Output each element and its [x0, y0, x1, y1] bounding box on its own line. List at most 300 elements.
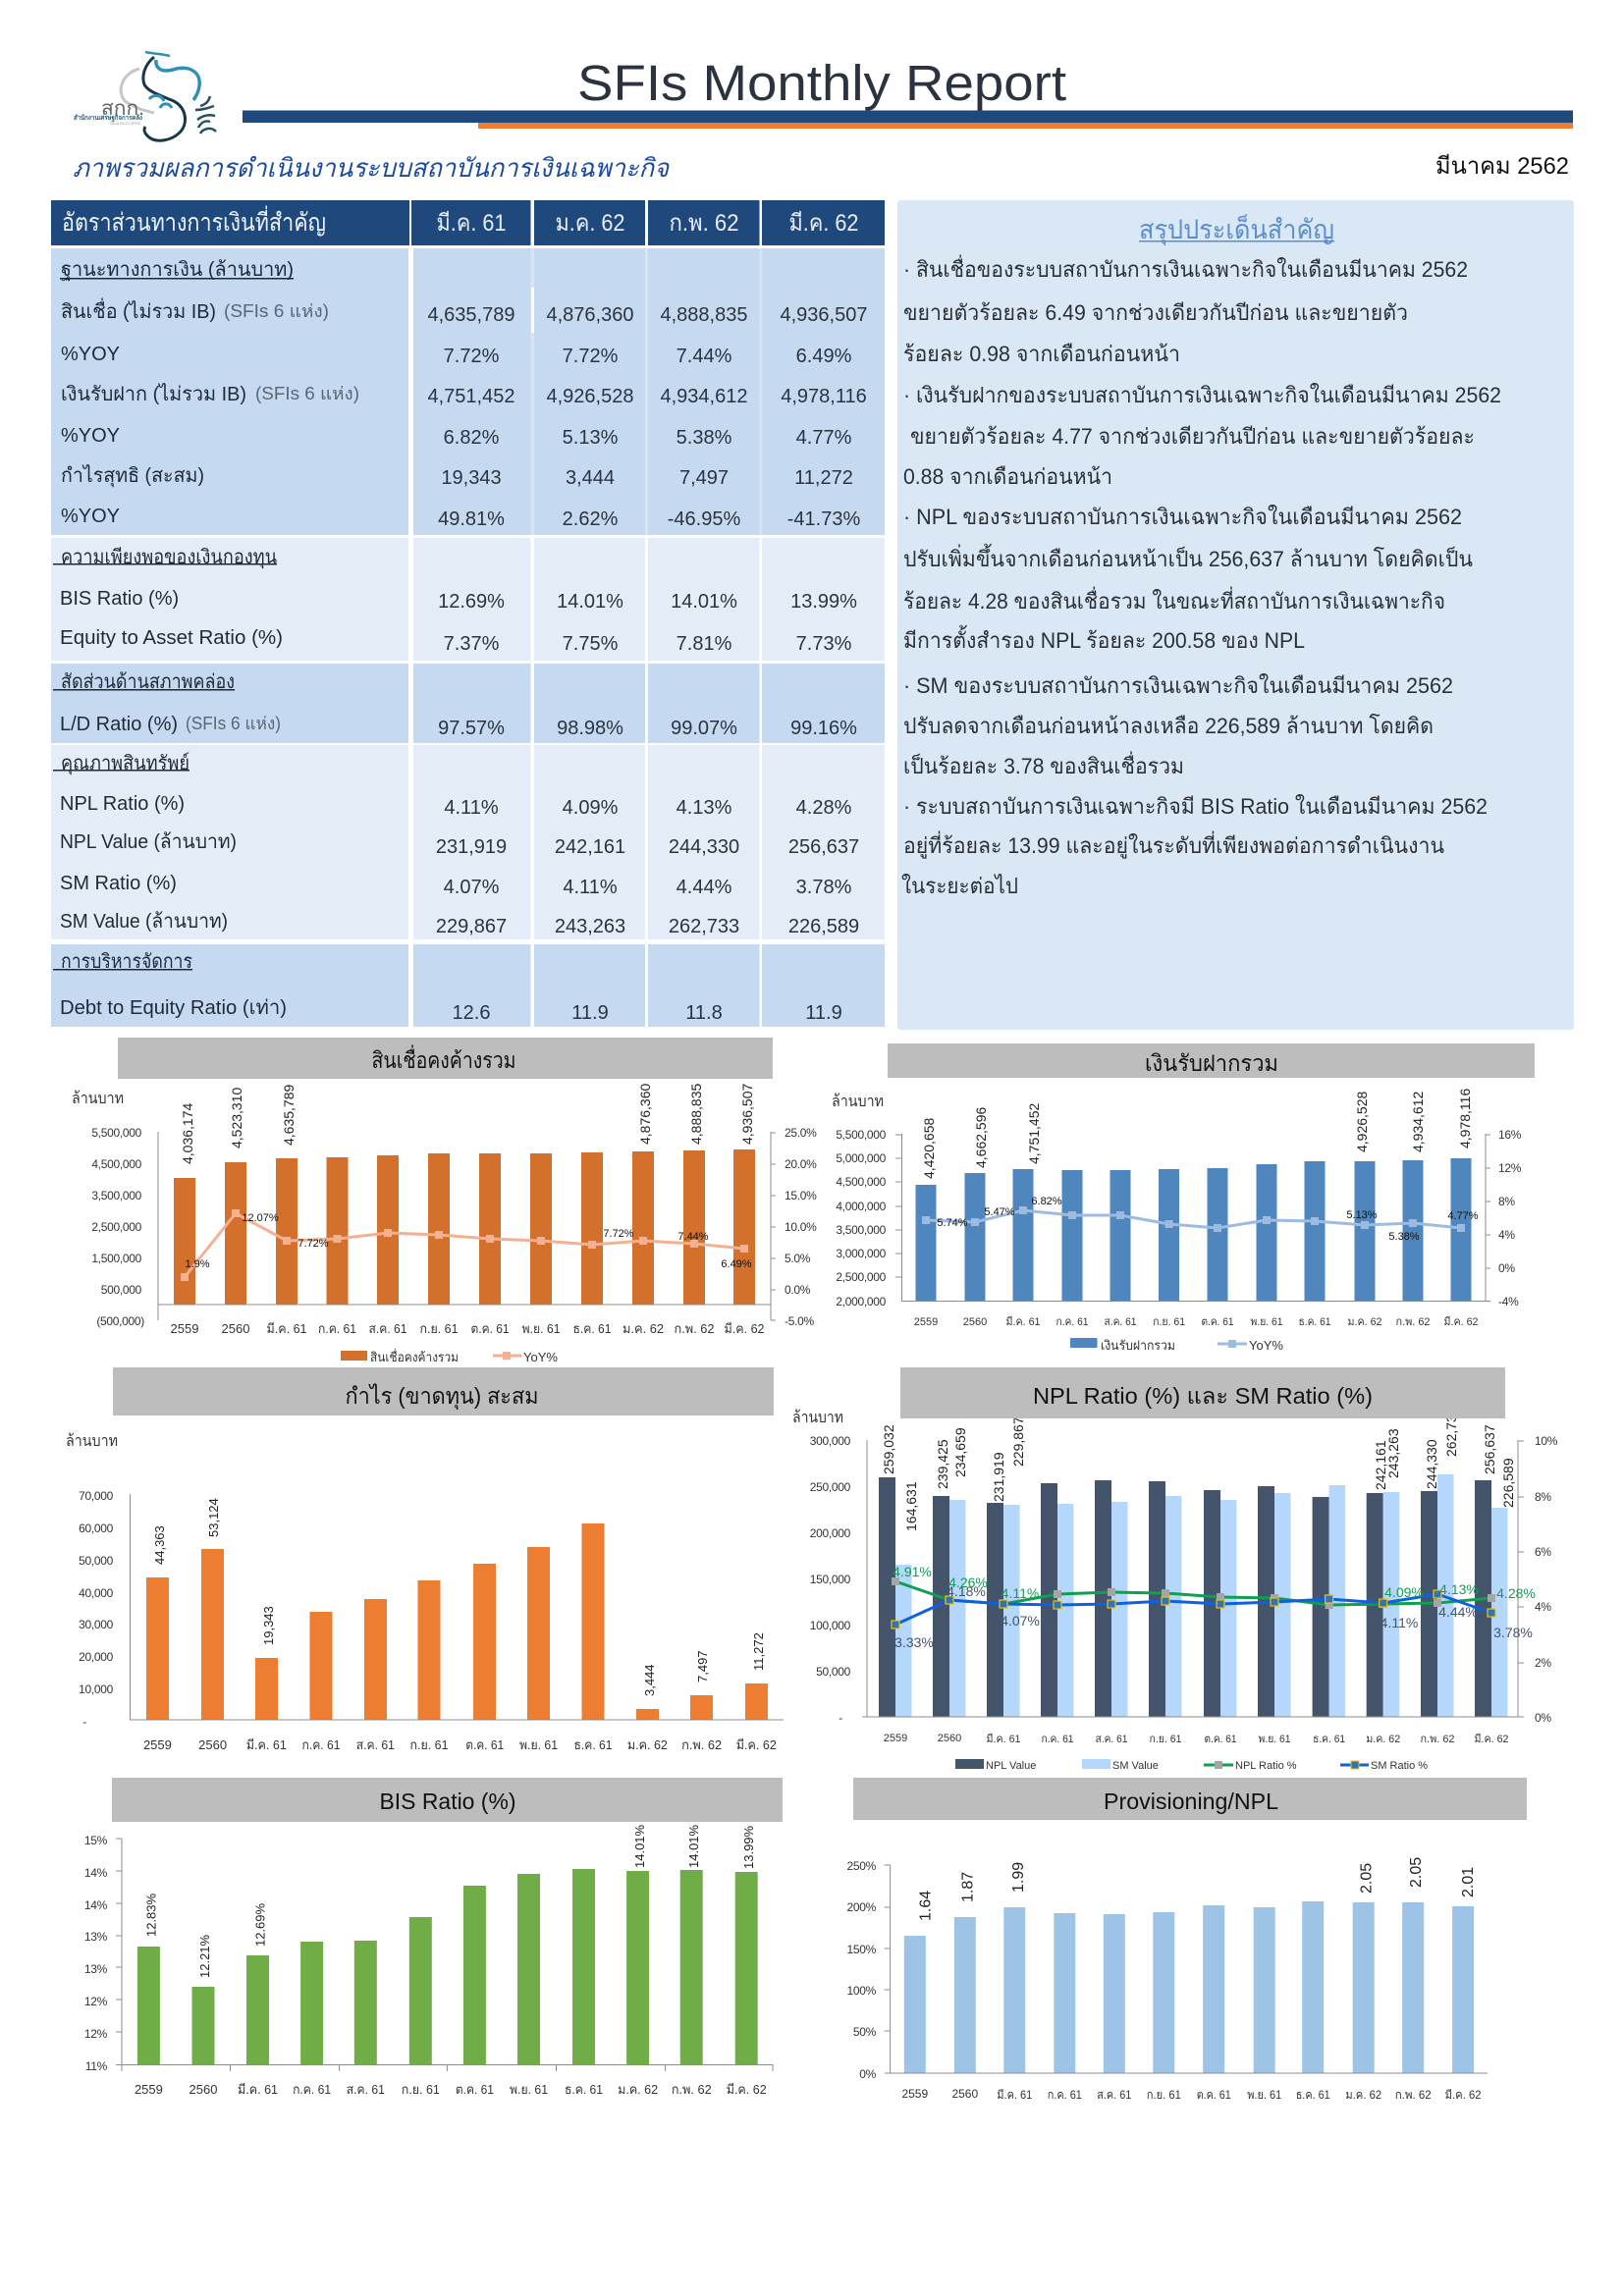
- bar value labels: 4,876,360: [637, 1084, 653, 1145]
- legend: สินเชื่อคงค้างรวม: [370, 1349, 459, 1364]
- x axis labels: พ.ย. 61: [519, 1737, 558, 1752]
- right axis: 10.0%: [785, 1220, 817, 1234]
- chart title bar: สินเชื่อคงค้างรวม: [371, 1044, 516, 1073]
- SM ratio data labels: 3.78%: [1493, 1625, 1533, 1640]
- legend: SM Value: [1112, 1760, 1159, 1772]
- section: financial position: 4,876,360: [547, 304, 633, 326]
- NPL ratio line: [892, 1577, 1495, 1609]
- right axis: [1535, 1434, 1558, 1725]
- chart title bar: [853, 1778, 1527, 1820]
- right axis: -4%: [1498, 1295, 1519, 1308]
- panel: financial ratios table: [51, 200, 885, 1027]
- bar value labels: 14.01%: [632, 1824, 647, 1868]
- section: asset quality: NPL Ratio (%): [60, 793, 185, 815]
- x axis labels: ส.ค. 61: [1097, 2088, 1132, 2102]
- section: financial position: 4.77%: [796, 427, 852, 449]
- summary bullet: SM: [903, 673, 1453, 778]
- x axis labels: ก.พ. 62: [1420, 1734, 1455, 1745]
- left axis: 4,500,000: [836, 1175, 887, 1189]
- left axis: 150,000: [810, 1573, 851, 1586]
- summary bullet: NPL: ปรับเพิ่มขึ้นจากเดือนก่อนหน้าเป็น 256,637 ล้านบาท โดยคิดเป็น: [903, 544, 1473, 571]
- section: asset quality: 4.13%: [677, 797, 732, 819]
- legend: YoY%: [523, 1350, 558, 1364]
- y axis: 10,000: [79, 1682, 114, 1696]
- section: management: Debt to Equity Ratio (เท่า): [60, 997, 287, 1019]
- YoY data labels: 7.72%: [603, 1228, 634, 1240]
- section: financial position: 7.72%: [563, 346, 619, 367]
- legend: [341, 1349, 558, 1364]
- legend: SM Ratio %: [1371, 1760, 1428, 1772]
- NPL ratio data labels: 4.11%: [1001, 1585, 1039, 1601]
- bar value labels: 243,263: [1385, 1428, 1401, 1478]
- section: financial position: (SFIs 6 แห่ง): [255, 384, 359, 403]
- bar value labels: 242,161: [1373, 1440, 1388, 1490]
- section: asset quality: 242,161: [555, 836, 625, 858]
- YoY data labels: [937, 1196, 1479, 1243]
- section: financial position: 4,936,507: [781, 304, 867, 326]
- section: capital adequacy: 14.01%: [557, 591, 623, 613]
- SM ratio data labels: [894, 1583, 1533, 1650]
- section: financial position: 7.72%: [444, 346, 500, 367]
- x axis labels: 2560: [951, 2087, 978, 2101]
- x axis labels: มี.ค. 61: [246, 1737, 287, 1752]
- x axis labels: พ.ย. 61: [522, 1321, 560, 1336]
- section: asset quality: 4.11%: [563, 877, 618, 898]
- x axis labels: ธ.ค. 61: [565, 2082, 603, 2097]
- x axis labels: [884, 1733, 1508, 1745]
- x axis labels: ม.ค. 62: [618, 2082, 658, 2097]
- YoY data labels: 12.07%: [242, 1212, 279, 1224]
- bar value labels: 234,659: [952, 1427, 968, 1477]
- summary bullet: NPL: [903, 505, 1473, 653]
- YoY data labels: 7.44%: [677, 1231, 709, 1243]
- right axis: 2%: [1535, 1656, 1551, 1670]
- left axis: 2,500,000: [91, 1220, 142, 1234]
- x axis labels: ธ.ค. 61: [1298, 1316, 1331, 1328]
- y axis: 30,000: [79, 1618, 114, 1631]
- chart title bar: [118, 1038, 773, 1079]
- section: liquidity: สัดส่วนด้านสภาพคล่อง: [61, 671, 235, 693]
- NPL ratio data labels: 4.09%: [1384, 1584, 1424, 1600]
- bar value labels: [921, 1089, 1473, 1179]
- left axis: 2,500,000: [836, 1270, 887, 1284]
- x axis labels: ก.ย. 61: [1149, 1734, 1182, 1745]
- x axis labels: มี.ค. 62: [725, 1321, 764, 1336]
- section: asset quality: NPL Value (ล้านบาท): [60, 831, 237, 853]
- x axis labels: ก.ย. 61: [410, 1737, 448, 1752]
- bar value labels: 231,919: [991, 1452, 1006, 1502]
- x axis labels: ส.ค. 61: [1096, 1734, 1127, 1745]
- x axis labels: 2559: [135, 2082, 163, 2097]
- y axis: [84, 1834, 773, 2073]
- section: asset quality: 226,589: [788, 916, 859, 937]
- section: capital adequacy: 7.37%: [444, 633, 500, 655]
- subtitle: ภาพรวมผลการดำเนินงานระบบสถาบันการเงินเฉพาะกิจ: [73, 153, 671, 183]
- section: management: 11.9: [571, 1002, 609, 1024]
- chart title bar: เงินรับฝากรวม: [1145, 1050, 1278, 1076]
- chart: BIS ratio: [84, 1778, 783, 2097]
- bars: [137, 1869, 758, 2064]
- y axis: 50%: [853, 2025, 877, 2039]
- unit label: ล้านบาท: [72, 1090, 124, 1107]
- x axis labels: ก.ย. 61: [420, 1321, 458, 1336]
- left axis: 3,000,000: [836, 1247, 887, 1260]
- YoY data labels: 5.47%: [984, 1206, 1015, 1218]
- left axis: [810, 1434, 1524, 1725]
- y axis: 150%: [846, 1943, 877, 1956]
- YoY data labels: 6.49%: [721, 1258, 752, 1270]
- bar value labels: [917, 1857, 1477, 1921]
- chart: NPL and SM ratio: [792, 1367, 1558, 1772]
- section: asset quality: 3.78%: [796, 877, 852, 898]
- section: capital adequacy: 7.81%: [677, 633, 732, 655]
- x axis labels: ต.ค. 61: [1197, 2088, 1231, 2102]
- right axis: 15.0%: [785, 1189, 817, 1202]
- title: SFIs Monthly Report: [577, 55, 1066, 111]
- section: financial position: 4,751,452: [428, 386, 514, 407]
- section: liquidity: 97.57%: [438, 718, 505, 739]
- x axis labels: 2560: [222, 1321, 249, 1336]
- x axis labels: 2559: [143, 1737, 172, 1752]
- x axis labels: [171, 1321, 764, 1336]
- y axis: 100%: [846, 1984, 877, 1998]
- bar value labels: 259,032: [881, 1424, 896, 1474]
- bars: [174, 1149, 755, 1305]
- section: financial position: กำไรสุทธิ (สะสม): [61, 464, 204, 488]
- header bar orange: [478, 123, 1573, 129]
- bar value labels: 13.99%: [741, 1825, 756, 1869]
- section: asset quality: 4.44%: [677, 877, 732, 898]
- left axis: 300,000: [810, 1434, 851, 1448]
- x axis labels: 2559: [171, 1321, 198, 1336]
- bar value labels: 4,523,310: [229, 1088, 244, 1148]
- y axis: 13%: [84, 1930, 108, 1944]
- x axis labels: ต.ค. 61: [1202, 1316, 1233, 1328]
- left axis: 1,500,000: [91, 1252, 142, 1265]
- section: financial position: สินเชื่อ (ไม่รวม IB): [61, 297, 216, 323]
- x axis labels: มี.ค. 62: [1445, 2088, 1482, 2102]
- section: capital adequacy: 14.01%: [671, 591, 737, 613]
- summary bullet: deposits: ขยายตัวร้อยละ 4.77 จากช่วงเดียวกันปีก่อน และขยายตัวร้อยละ: [910, 424, 1475, 449]
- section: financial position: 2.62%: [563, 508, 619, 530]
- x axis labels: ม.ค. 62: [627, 1737, 668, 1752]
- section: liquidity: 99.07%: [671, 718, 737, 739]
- chart title bar: NPL Ratio (%) และ SM Ratio (%): [1033, 1383, 1373, 1409]
- x axis labels: 2559: [884, 1733, 907, 1744]
- NPL ratio data labels: 4.91%: [893, 1564, 932, 1579]
- NPL ratio data labels: [893, 1564, 1536, 1601]
- x axis labels: พ.ย. 61: [510, 2082, 548, 2097]
- right axis: 4%: [1498, 1228, 1515, 1242]
- bar value labels: 2.05: [1359, 1863, 1375, 1894]
- bar value labels: 12.21%: [197, 1934, 212, 1978]
- section: liquidity: 99.16%: [790, 718, 857, 739]
- right axis: -5.0%: [785, 1314, 814, 1328]
- x axis labels: ม.ค. 62: [623, 1321, 664, 1336]
- section: asset quality: 231,919: [436, 836, 507, 858]
- SM ratio data labels: 4.44%: [1438, 1604, 1478, 1620]
- left axis: 50,000: [816, 1665, 851, 1679]
- x axis labels: ก.พ. 62: [1395, 2088, 1432, 2102]
- section: capital adequacy: ความเพียงพอของเงินกองทุน: [61, 547, 277, 569]
- x axis labels: ต.ค. 61: [456, 2082, 494, 2097]
- section: financial position: 4,934,612: [661, 386, 747, 407]
- bars: [146, 1523, 768, 1720]
- NPL ratio data labels: 4.26%: [948, 1575, 988, 1590]
- chart: total deposits: [832, 1043, 1535, 1353]
- bar value labels: 256,637: [1482, 1424, 1497, 1474]
- section: asset quality: 262,733: [669, 916, 739, 937]
- legend: NPL Value: [986, 1760, 1036, 1772]
- x axis labels: พ.ย. 61: [1247, 2088, 1281, 2102]
- section: management: การบริหารจัดการ: [61, 951, 192, 973]
- x axis labels: พ.ย. 61: [1251, 1316, 1282, 1328]
- bar value labels: 4,036,174: [180, 1103, 195, 1164]
- summary bullet: deposits: · เงินรับฝากของระบบสถาบันการเงินเฉพาะกิจในเดือนมีนาคม 2562: [903, 383, 1501, 407]
- left axis: [836, 1128, 1490, 1308]
- table header row: [51, 200, 885, 245]
- bar value labels: 1.99: [1010, 1862, 1027, 1893]
- left axis: 5,500,000: [91, 1126, 142, 1140]
- x axis labels: 2560: [938, 1733, 961, 1744]
- y axis: 50,000: [79, 1554, 114, 1568]
- section: financial position: เงินรับฝาก (ไม่รวม IB): [61, 383, 246, 405]
- legend: [955, 1759, 1428, 1772]
- chart title bar: [112, 1778, 783, 1822]
- y axis: 15%: [84, 1834, 108, 1847]
- section: management: 11.8: [685, 1002, 723, 1024]
- bar value labels: 2.05: [1408, 1857, 1425, 1888]
- right axis: 5.0%: [785, 1252, 811, 1265]
- section: financial position: 4,926,528: [547, 386, 633, 407]
- summary bullet: BIS: อยู่ที่ร้อยละ 13.99 และอยู่ในระดับที่เพียงพอต่อการดำเนินงาน: [903, 830, 1444, 859]
- NPL ratio data labels: 4.13%: [1439, 1581, 1479, 1597]
- section: financial position: 19,343: [441, 467, 502, 489]
- bar value labels: [152, 1498, 766, 1696]
- section: financial position: %YOY: [61, 344, 120, 365]
- x axis labels: ก.ค. 61: [302, 1737, 340, 1752]
- summary bullet: SM: ปรับลดจากเดือนก่อนหน้าลงเหลือ 226,589 ล้านบาท โดยคิด: [903, 714, 1434, 738]
- chart title bar: BIS Ratio (%): [379, 1789, 516, 1814]
- section: capital adequacy: 13.99%: [790, 591, 857, 613]
- bar value labels: 19,343: [261, 1606, 276, 1645]
- SM ratio data labels: 4.07%: [1001, 1613, 1040, 1629]
- x axis labels: มี.ค. 62: [1475, 1733, 1508, 1745]
- x axis labels: ม.ค. 62: [1347, 1316, 1382, 1328]
- x axis labels: ส.ค. 61: [369, 1321, 406, 1336]
- bar value labels: 44,363: [152, 1525, 167, 1565]
- x axis labels: ธ.ค. 61: [573, 1737, 613, 1752]
- y axis: 0%: [859, 2067, 877, 2081]
- bar value labels: 4,888,835: [688, 1084, 704, 1145]
- bar value labels: 4,936,507: [739, 1084, 755, 1145]
- chart title bar: [900, 1367, 1505, 1418]
- bar value labels: 226,589: [1500, 1458, 1516, 1508]
- bars: [904, 1901, 1474, 2073]
- header: [73, 52, 1573, 183]
- summary bullet: NPL: มีการตั้งสำรอง NPL ร้อยละ 200.58 ของ NPL: [903, 625, 1305, 653]
- section: financial position: 49.81%: [438, 508, 505, 530]
- chart: accumulated profit: [66, 1367, 784, 1752]
- bar value labels: 4,662,596: [973, 1107, 989, 1168]
- YoY line: [181, 1209, 748, 1281]
- section: asset quality: 244,330: [669, 836, 739, 858]
- chart title bar: Provisioning/NPL: [1104, 1789, 1278, 1814]
- x axis labels: ก.ค. 61: [1056, 1316, 1088, 1328]
- section: management: [51, 944, 885, 1027]
- x axis labels: พ.ย. 61: [1259, 1734, 1290, 1745]
- left axis: 250,000: [810, 1480, 851, 1494]
- unit label: ล้านบาท: [66, 1432, 118, 1450]
- bar value labels: [180, 1084, 755, 1164]
- bar value labels: 239,425: [935, 1439, 950, 1489]
- x axis labels: มี.ค. 62: [727, 2082, 767, 2097]
- summary bullet: SM: · SM ของระบบสถาบันการเงินเฉพาะกิจในเดือนมีนาคม 2562: [903, 673, 1453, 698]
- section: financial position: (SFIs 6 แห่ง): [224, 301, 329, 321]
- bar value labels: 1.87: [960, 1872, 976, 1902]
- summary bullet: loans: · สินเชื่อของระบบสถาบันการเงินเฉพาะกิจในเดือนมีนาคม 2562: [903, 254, 1468, 282]
- bar value labels: 4,926,528: [1354, 1092, 1370, 1152]
- x axis labels: ก.ค. 61: [1041, 1734, 1074, 1745]
- summary bullet: SM: เป็นร้อยละ 3.78 ของสินเชื่อรวม: [903, 751, 1184, 778]
- section: financial position: %YOY: [61, 425, 120, 447]
- y axis: 12%: [84, 2027, 108, 2041]
- summary bullet: loans: [903, 254, 1468, 366]
- x axis labels: ต.ค. 61: [465, 1737, 504, 1752]
- section: financial position: -46.95%: [668, 508, 740, 530]
- x axis labels: มี.ค. 61: [986, 1733, 1021, 1745]
- SM ratio data labels: 3.33%: [894, 1634, 934, 1650]
- x axis labels: มี.ค. 61: [267, 1321, 306, 1336]
- x axis labels: ธ.ค. 61: [1313, 1734, 1345, 1745]
- YoY data labels: 1.9%: [185, 1258, 210, 1270]
- bar value labels: 14.01%: [686, 1824, 701, 1868]
- YoY data labels: 5.38%: [1388, 1231, 1420, 1243]
- x axis labels: มี.ค. 61: [238, 2082, 278, 2097]
- x axis labels: ก.พ. 62: [674, 1321, 715, 1336]
- section: liquidity: (SFIs 6 แห่ง): [186, 714, 281, 733]
- legend: YoY%: [1249, 1338, 1283, 1353]
- bar value labels: 12.83%: [144, 1893, 159, 1937]
- chart title bar: [113, 1367, 774, 1415]
- y axis: 60,000: [79, 1522, 114, 1535]
- right axis: 0%: [1498, 1261, 1515, 1275]
- y axis: 12%: [84, 1995, 108, 2008]
- x axis labels: ก.พ. 62: [672, 2082, 712, 2097]
- right axis: [1498, 1128, 1522, 1308]
- section: liquidity: [51, 664, 885, 743]
- table header row: ก.พ. 62: [670, 210, 738, 237]
- section: financial position: 4,888,835: [661, 304, 747, 326]
- section: asset quality: SM Ratio (%): [60, 873, 177, 894]
- section: asset quality: 243,263: [555, 916, 625, 937]
- x axis labels: ส.ค. 61: [356, 1737, 395, 1752]
- x axis labels: ม.ค. 62: [1366, 1734, 1400, 1745]
- section: financial position: [51, 248, 885, 535]
- bar value labels: 4,751,452: [1026, 1103, 1042, 1164]
- x axis labels: มี.ค. 62: [736, 1737, 777, 1752]
- summary bullet: deposits: [903, 383, 1501, 489]
- YoY data labels: [185, 1212, 752, 1270]
- x axis labels: มี.ค. 61: [1005, 1315, 1041, 1328]
- y axis: 70,000: [79, 1489, 114, 1503]
- x axis labels: ก.ค. 61: [318, 1321, 356, 1336]
- section: financial position: 4,978,116: [781, 386, 867, 407]
- YoY line: [922, 1206, 1465, 1232]
- section: asset quality: 4.11%: [444, 797, 499, 819]
- bar value labels: 7,497: [695, 1650, 710, 1682]
- NPL value bars: [879, 1477, 1491, 1717]
- section: capital adequacy: 7.73%: [796, 633, 852, 655]
- bar value labels: 12.69%: [252, 1902, 267, 1947]
- bar value labels: [144, 1824, 756, 1978]
- bar value labels: 262,733: [1443, 1407, 1459, 1457]
- right axis: 6%: [1535, 1545, 1551, 1559]
- panel: key points summary: [897, 200, 1574, 1030]
- y axis: 11%: [85, 2059, 108, 2073]
- YoY data labels: 5.13%: [1346, 1209, 1378, 1221]
- x axis labels: มี.ค. 62: [1443, 1315, 1479, 1328]
- x axis labels: ก.ย. 61: [1153, 1316, 1185, 1328]
- y axis: 14%: [84, 1866, 108, 1880]
- x axis labels: ธ.ค. 61: [573, 1321, 611, 1336]
- SM ratio data labels: 4.11%: [1380, 1615, 1418, 1630]
- section: financial position: 5.13%: [563, 427, 619, 449]
- section: asset quality: 4.28%: [796, 797, 852, 819]
- summary bullet: NPL: · NPL ของระบบสถาบันการเงินเฉพาะกิจในเดือนมีนาคม 2562: [903, 505, 1462, 529]
- section: financial position: ฐานะทางการเงิน (ล้านบาท): [61, 259, 294, 281]
- y axis: 200%: [846, 1900, 877, 1914]
- left axis: 3,500,000: [836, 1223, 887, 1237]
- x axis labels: ก.ค. 61: [1048, 2088, 1082, 2102]
- summary bullet: loans: ขยายตัวร้อยละ 6.49 จากช่วงเดียวกันปีก่อน และขยายตัว: [903, 300, 1408, 325]
- section: financial position: 6.49%: [796, 346, 852, 367]
- summary bullet: BIS: [901, 794, 1488, 898]
- summary bullet: deposits: 0.88 จากเดือนก่อนหน้า: [903, 464, 1112, 489]
- icon: logo: สำนักงานเศรษฐกิจการคลัง: [74, 114, 143, 123]
- y axis: [79, 1489, 130, 1729]
- bar value labels: 2.01: [1460, 1867, 1477, 1897]
- y axis: -: [82, 1715, 86, 1729]
- right axis: 8%: [1498, 1195, 1515, 1208]
- table header row: มี.ค. 61: [436, 210, 507, 237]
- section: financial position: 3,444: [566, 467, 615, 489]
- section: liquidity: L/D Ratio (%): [60, 714, 178, 735]
- x axis labels: ต.ค. 61: [1204, 1734, 1237, 1745]
- left axis: 5,000,000: [836, 1151, 887, 1165]
- bar value labels: 3,444: [642, 1664, 657, 1696]
- section: financial position: 6.82%: [444, 427, 500, 449]
- left axis: 4,500,000: [91, 1157, 142, 1171]
- y axis: [846, 1859, 891, 2081]
- icon: logo: FISCAL POLICY OFFICE: [110, 121, 140, 126]
- x axis labels: [914, 1315, 1479, 1328]
- header bar navy: [243, 110, 1573, 123]
- section: financial position: 4,635,789: [428, 304, 514, 326]
- table header row: ม.ค. 62: [556, 210, 624, 237]
- x axis labels: ก.พ. 62: [681, 1737, 722, 1752]
- bar value labels: 4,635,789: [281, 1085, 297, 1146]
- left axis: -: [839, 1711, 842, 1725]
- section: asset quality: SM Value (ล้านบาท): [60, 911, 228, 933]
- left axis: (500,000): [96, 1314, 144, 1328]
- section: financial position: 7,497: [679, 467, 729, 489]
- section: financial position: -41.73%: [787, 508, 860, 530]
- legend: เงินรับฝากรวม: [1101, 1338, 1175, 1353]
- section: asset quality: 229,867: [436, 916, 507, 937]
- summary heading: สรุปประเด็นสำคัญ: [1139, 212, 1334, 246]
- y axis: 14%: [84, 1898, 108, 1912]
